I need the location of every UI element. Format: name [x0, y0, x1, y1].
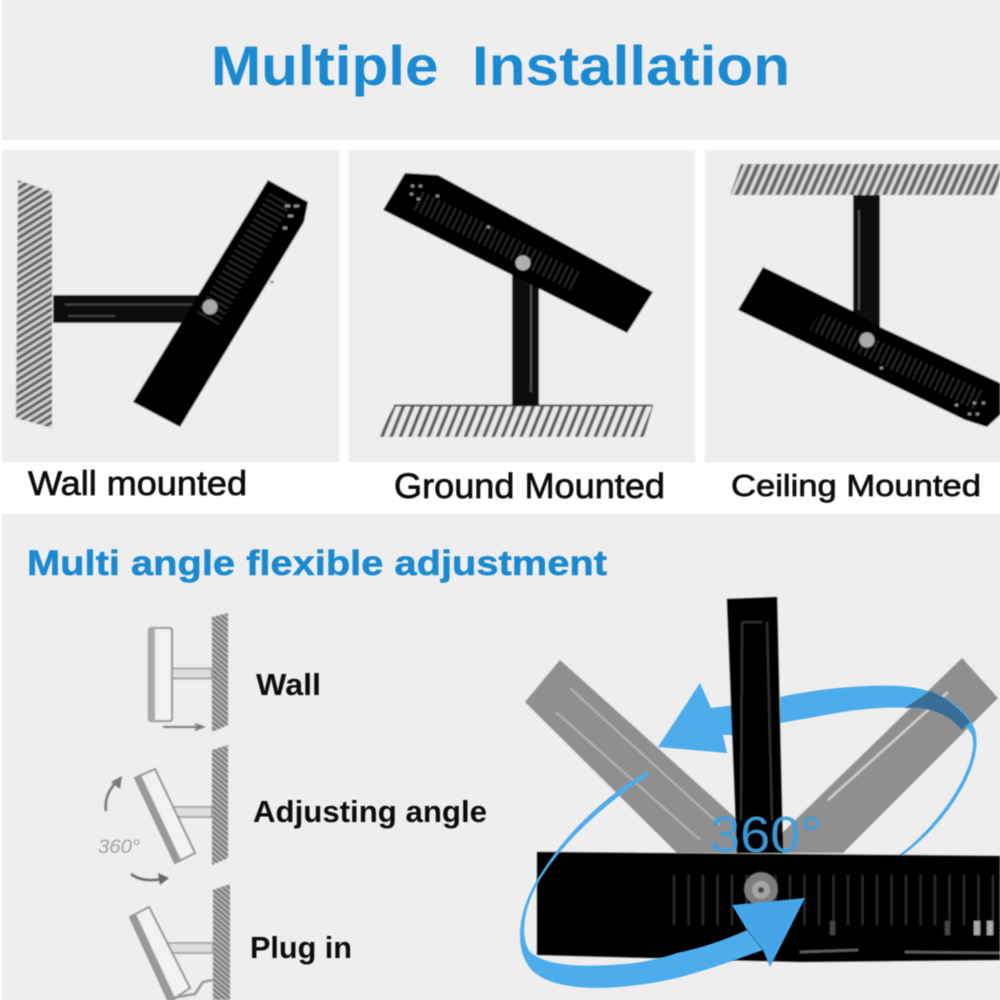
label: 360 small: 360° — [98, 837, 140, 858]
lamp — [130, 907, 190, 1000]
wall — [212, 745, 228, 865]
pivot bolt — [744, 872, 778, 906]
panel: title band — [2, 0, 1000, 140]
lamp — [135, 769, 195, 863]
label: ground mounted: Ground Mounted — [394, 467, 665, 506]
lamp vents — [810, 312, 985, 410]
label: wall mounted: Wall mounted — [28, 465, 247, 503]
top rotation arrow — [106, 779, 119, 811]
lamp side strip — [135, 775, 181, 863]
pivot bolt — [860, 332, 874, 348]
darker overlap on arm — [905, 691, 970, 730]
arrow lower head — [732, 898, 805, 967]
lamp vents — [410, 190, 580, 290]
ceiling hatching — [730, 164, 1000, 195]
bottom rotation arrow — [131, 874, 163, 880]
support arm — [853, 195, 880, 330]
support arm — [512, 270, 539, 406]
floodlight body — [537, 852, 1000, 962]
step: wall diagram — [149, 613, 228, 732]
arrow top head — [658, 683, 735, 753]
arm — [163, 668, 212, 678]
mounting arm — [53, 295, 203, 323]
floodlight — [383, 173, 653, 333]
arm slit — [858, 210, 860, 310]
wall — [213, 884, 230, 1000]
lamp side strip — [149, 628, 155, 721]
floodlight — [133, 180, 308, 427]
wall hatching — [16, 180, 52, 428]
wall — [212, 613, 228, 732]
arm — [163, 943, 213, 953]
label: adjusting angle: Adjusting angle — [253, 794, 487, 829]
lamp vent dots — [410, 186, 490, 227]
arrow top band — [780, 686, 977, 855]
lamp vents — [196, 192, 292, 326]
arm slit — [530, 285, 532, 392]
label: ceiling mounted: Ceiling Mounted — [731, 468, 981, 503]
lamp vent dots — [270, 206, 299, 282]
arrow — [163, 724, 203, 730]
ground line — [394, 404, 653, 406]
floodlight — [738, 267, 1000, 427]
pivot bolt — [516, 256, 530, 270]
title: Multiple Installation — [211, 34, 790, 97]
heading: multi angle: Multi angle flexible adjustment — [27, 544, 607, 583]
lamp — [149, 628, 172, 721]
ghost arm right — [780, 658, 998, 853]
arm — [168, 807, 212, 817]
product: 360 rotation illustration — [520, 597, 1000, 988]
lamp vent dots — [880, 368, 985, 414]
black arm — [727, 597, 783, 853]
panel: ground mounted — [349, 150, 695, 462]
step: plug in diagram — [130, 884, 230, 1000]
label: wall: Wall — [256, 667, 321, 702]
ground hatching — [378, 406, 653, 437]
label: 360 large: 360° — [710, 806, 822, 863]
arm slits — [65, 304, 195, 316]
arrow lower sweep — [520, 771, 763, 988]
lamp side strip — [130, 914, 176, 1000]
pivot bolt — [202, 300, 218, 314]
panel: wall mounted — [2, 150, 339, 462]
panel: ceiling mounted — [705, 150, 1000, 462]
ghost arm left — [525, 660, 740, 853]
step: adjusting diagram — [106, 745, 228, 885]
panel: angle adjustment — [2, 514, 1000, 1000]
plug cable — [172, 980, 213, 998]
label: plug in: Plug in — [250, 930, 352, 965]
